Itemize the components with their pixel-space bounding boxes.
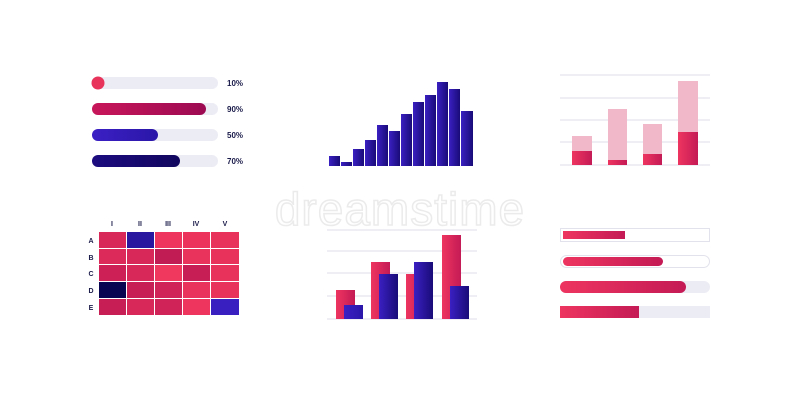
panel: progress bars: 50% — [227, 131, 243, 140]
chart: heatmap: III — [165, 221, 171, 228]
chart: heatmap: I — [111, 221, 113, 228]
chart: heatmap: B — [88, 255, 94, 262]
chart: heatmap: E — [89, 305, 94, 312]
panel: horizontal bars — [560, 228, 710, 318]
chart: grouped bars — [327, 230, 477, 319]
chart: heatmap: A — [88, 238, 94, 245]
chart: heatmap — [88, 221, 239, 315]
panel: progress bars: 10% — [227, 79, 243, 88]
chart: heatmap: D — [88, 288, 94, 295]
panel: progress bars: 70% — [227, 157, 243, 166]
chart: heatmap: C — [88, 271, 94, 278]
chart: heatmap: II — [138, 221, 142, 228]
watermark: dreamstime — [275, 183, 525, 235]
chart: heatmap: V — [223, 221, 228, 228]
chart: heatmap: IV — [193, 221, 200, 228]
panel: progress bars: 90% — [227, 105, 243, 114]
chart: histogram — [329, 82, 473, 166]
panel: progress bars — [92, 76, 243, 167]
chart: stacked bars — [560, 75, 710, 165]
